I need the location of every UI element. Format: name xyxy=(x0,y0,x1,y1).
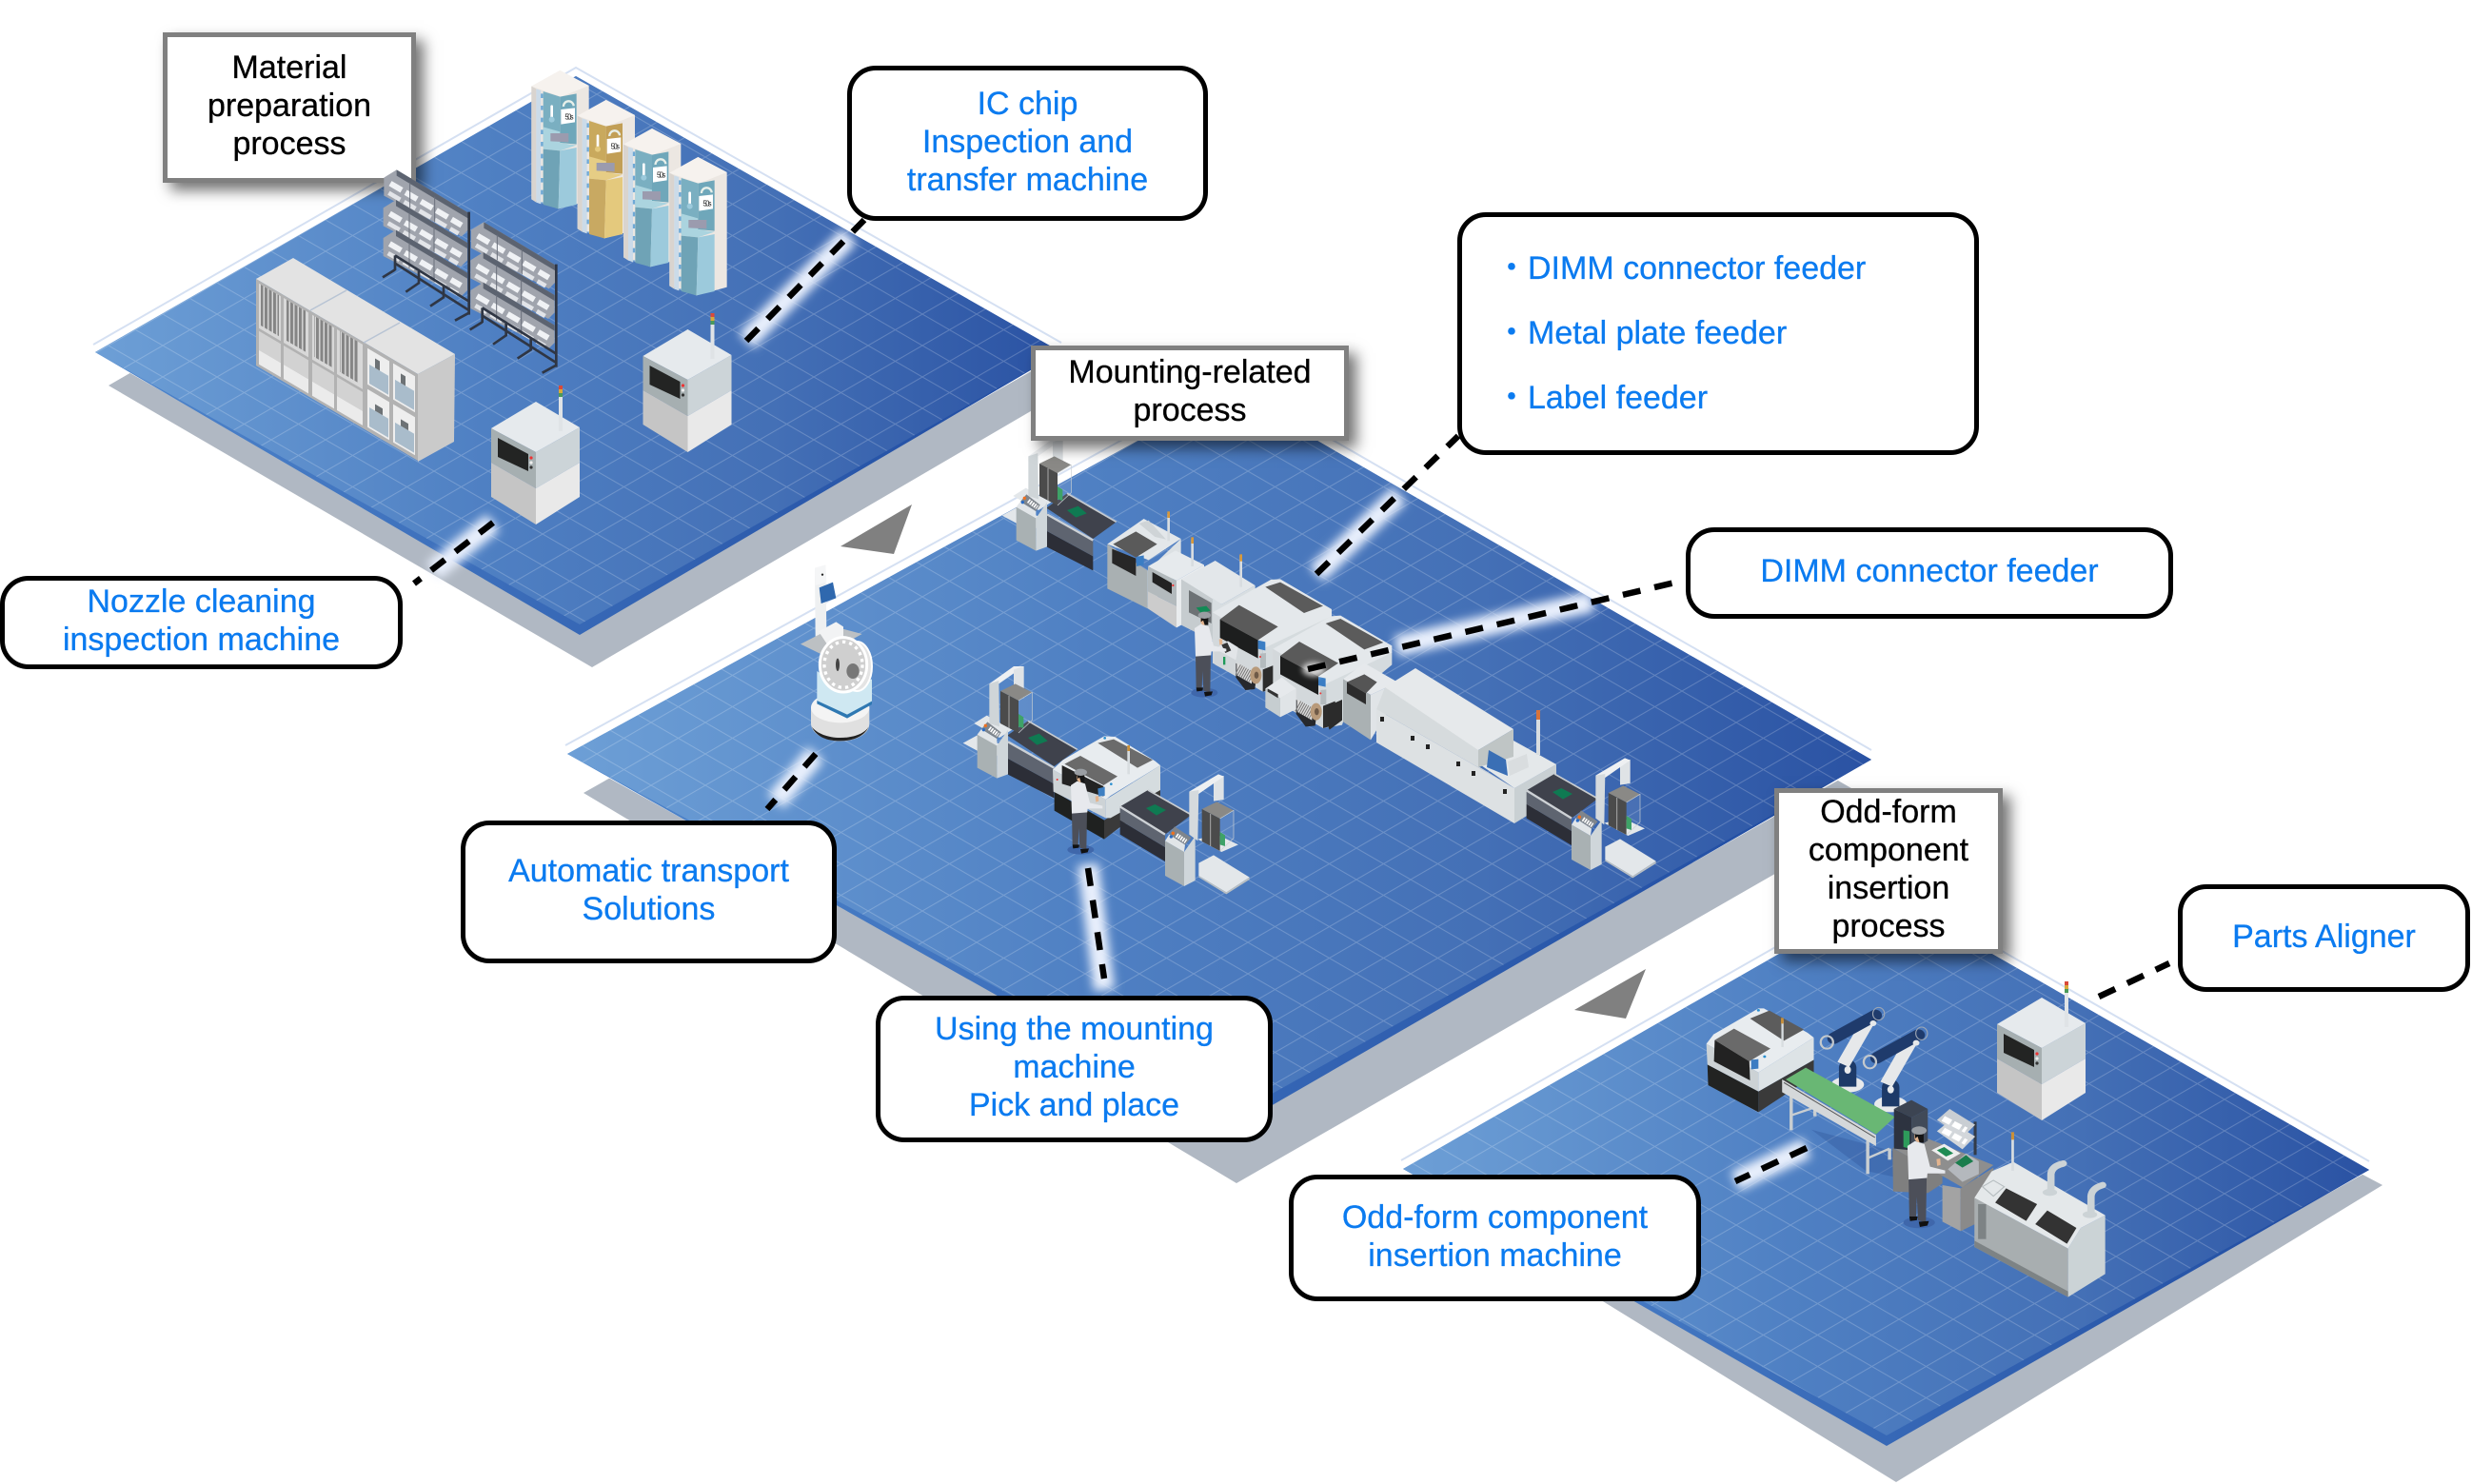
callout: odd-form machine xyxy=(1289,1175,1701,1301)
leader: odd-form machine xyxy=(1735,1148,1807,1181)
icon: operator console xyxy=(1216,641,1238,676)
icon: lower line mounter xyxy=(1053,736,1160,840)
icon: circuit boards xyxy=(1931,1144,1979,1182)
icon: material racks xyxy=(382,169,558,374)
callout: pick and place: Pick and place xyxy=(969,1087,1179,1123)
icon: upper line unloader xyxy=(1527,758,1656,878)
callout: odd-form machine: Odd-form component xyxy=(1342,1199,1648,1236)
leader: IC chip xyxy=(746,220,864,341)
heading: material preparation process: preparation xyxy=(208,88,371,124)
callout: nozzle cleaning machine xyxy=(0,576,403,669)
icon: mounter one xyxy=(1213,579,1332,692)
heading: material preparation process xyxy=(163,32,416,183)
icon: reflow oven xyxy=(1376,668,1556,823)
callout: odd-form machine: insertion machine xyxy=(1368,1237,1622,1274)
icon: upper line machines xyxy=(1107,511,1397,740)
icon: mounter two xyxy=(1273,616,1392,728)
callout: DIMM connector feeder: DIMM connector feeder xyxy=(1760,553,2099,589)
icon: assembly table xyxy=(1892,1131,1993,1231)
heading: odd-form process: component xyxy=(1809,832,1968,868)
icon: tape feeder one xyxy=(1236,663,1261,690)
callout: DIMM connector feeder xyxy=(1686,527,2173,619)
icon: automatic transport robot xyxy=(801,564,872,742)
callout: pick and place: machine xyxy=(1013,1049,1136,1085)
leader: parts aligner xyxy=(2099,963,2169,997)
heading: material preparation process: Material xyxy=(232,49,346,86)
callout: automatic transport: Solutions xyxy=(583,891,715,927)
icon: parts aligner machine xyxy=(1997,981,2086,1120)
icon: lower line loader xyxy=(963,666,1078,798)
leader: feeder list xyxy=(1316,436,1458,574)
heading: mounting-related process: Mounting-related xyxy=(1068,354,1312,390)
callout: automatic transport xyxy=(461,821,837,963)
icon: small unit xyxy=(1265,678,1296,717)
icon: tape feeder two xyxy=(1296,699,1322,726)
callout: IC chip machine xyxy=(847,66,1208,221)
icon: odd-form mounter xyxy=(1707,1008,1814,1112)
icon: green conveyor xyxy=(1782,1068,1895,1174)
callout: IC chip machine: IC chip xyxy=(978,86,1078,122)
icon: storage cabinets xyxy=(256,258,455,462)
icon: post unit xyxy=(1343,663,1397,740)
leader: nozzle cleaning xyxy=(414,523,493,584)
floor: odd-form insertion xyxy=(1401,884,2383,1482)
heading: odd-form process: insertion xyxy=(1828,870,1949,906)
icon: nozzle cleaning machine xyxy=(491,386,580,524)
icon: stencil printer xyxy=(1107,511,1181,608)
icon: magazine xyxy=(1894,1100,1928,1150)
arrow: mounting to odd-form xyxy=(1574,969,1646,1019)
callout: automatic transport: Automatic transport xyxy=(508,853,789,889)
heading: odd-form process: Odd-form xyxy=(1820,794,1957,830)
icon: lower line operator xyxy=(1067,769,1102,855)
icon: conveyor shadow xyxy=(1811,1130,1895,1177)
callout: pick and place: Using the mounting xyxy=(935,1011,1214,1047)
icon: inspection station xyxy=(1181,554,1256,641)
icon: odd-form insertion cell xyxy=(1707,1007,2106,1297)
leader: automatic transport xyxy=(767,754,816,809)
heading: odd-form process xyxy=(1774,788,2003,954)
floor: mounting xyxy=(565,381,1888,1183)
heading: odd-form process: process xyxy=(1831,908,1946,944)
callout: IC chip machine: transfer machine xyxy=(907,162,1148,198)
leader: pick and place xyxy=(1088,864,1104,990)
icon: odd-form operator xyxy=(1904,1126,1946,1228)
floor: material preparation xyxy=(93,68,1075,667)
callout: nozzle cleaning machine: Nozzle cleaning xyxy=(87,584,316,620)
heading: material preparation process: process xyxy=(232,126,346,162)
callout: IC chip machine: Inspection and xyxy=(922,124,1133,160)
icon: dark base xyxy=(1328,700,1342,730)
leader: DIMM connector xyxy=(1308,581,1683,669)
icon: robot arm two xyxy=(1864,1027,1928,1112)
callout: pick and place xyxy=(876,996,1273,1142)
icon: lower line pick and place xyxy=(963,666,1250,894)
icon: large machine xyxy=(1974,1132,2106,1297)
icon: storage towers xyxy=(531,70,727,295)
icon: solder inspection xyxy=(1148,537,1204,627)
callout: feeder list xyxy=(1457,212,1979,455)
icon: upper mounting line loader xyxy=(1002,439,1117,570)
heading: mounting-related process: process xyxy=(1133,392,1247,428)
icon: parts tray rack xyxy=(1937,1109,1975,1155)
callout: parts aligner: Parts Aligner xyxy=(2232,918,2416,954)
heading: mounting-related process xyxy=(1031,346,1349,441)
icon: lower line unloader xyxy=(1120,774,1250,894)
callout: feeder list: ・DIMM connector feeder ・Metal plate feeder ・Label feeder xyxy=(1495,250,1866,416)
callout: nozzle cleaning machine: inspection machine xyxy=(63,622,340,658)
icon: robot arm one xyxy=(1821,1007,1885,1093)
icon: IC chip inspection machine xyxy=(643,313,731,452)
icon: upper line operator xyxy=(1191,612,1226,698)
callout: parts aligner xyxy=(2178,884,2470,992)
arrow: material to mounting xyxy=(840,505,912,554)
